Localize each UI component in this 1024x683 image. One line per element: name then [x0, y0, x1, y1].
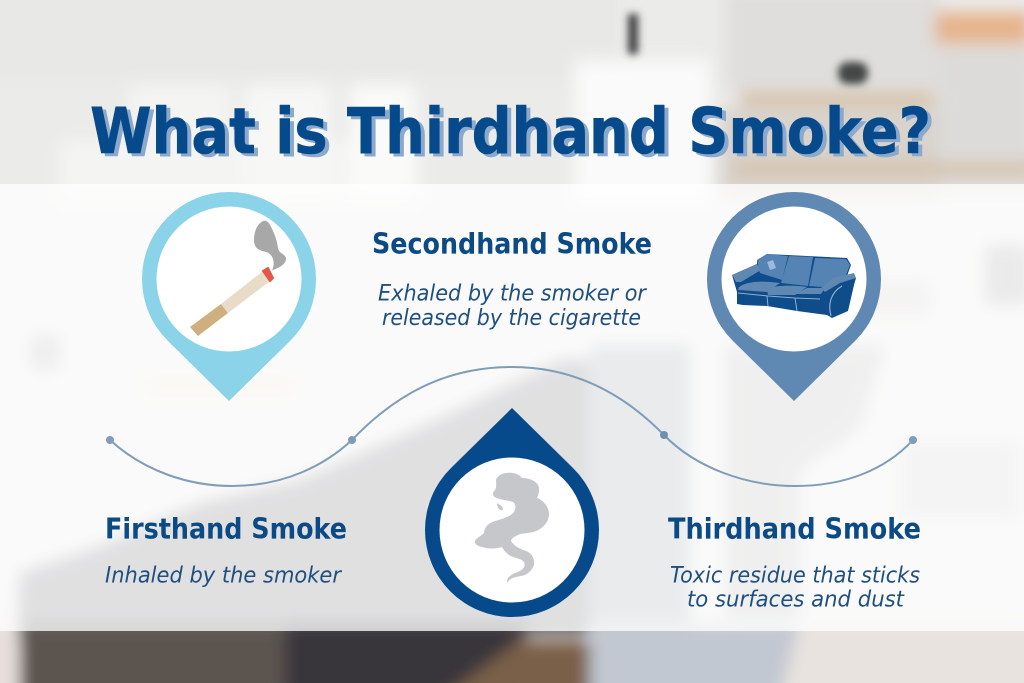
text block: thirdhand smoke: Thirdhand Smoke — [668, 512, 921, 546]
text block: secondhand smoke — [372, 228, 652, 331]
icon: sofa — [732, 254, 856, 318]
text block: firsthand smoke: Firsthand Smoke — [105, 512, 347, 546]
pin: smoke icon — [425, 408, 599, 617]
title: What is Thirdhand Smoke? — [94, 98, 935, 171]
text block: thirdhand smoke: to surfaces and dust — [687, 586, 905, 612]
connecting wave line — [106, 367, 917, 486]
text block: secondhand smoke: Exhaled by the smoker or — [378, 280, 648, 306]
text block: secondhand smoke: Secondhand Smoke — [372, 228, 652, 260]
pin: sofa icon — [707, 192, 881, 401]
icon: cigarette — [190, 221, 286, 336]
text block: firsthand smoke: Inhaled by the smoker — [105, 562, 343, 588]
text block: secondhand smoke: released by the cigarette — [382, 305, 641, 331]
icon: smoke — [475, 473, 549, 583]
text block: firsthand smoke — [105, 512, 347, 588]
pin: cigarette icon — [142, 192, 316, 401]
text block: thirdhand smoke — [668, 512, 921, 612]
translucent white content panel — [0, 184, 1024, 631]
title: What is Thirdhand Smoke? — [90, 95, 931, 168]
text block: thirdhand smoke: Toxic residue that sticks — [670, 562, 920, 588]
